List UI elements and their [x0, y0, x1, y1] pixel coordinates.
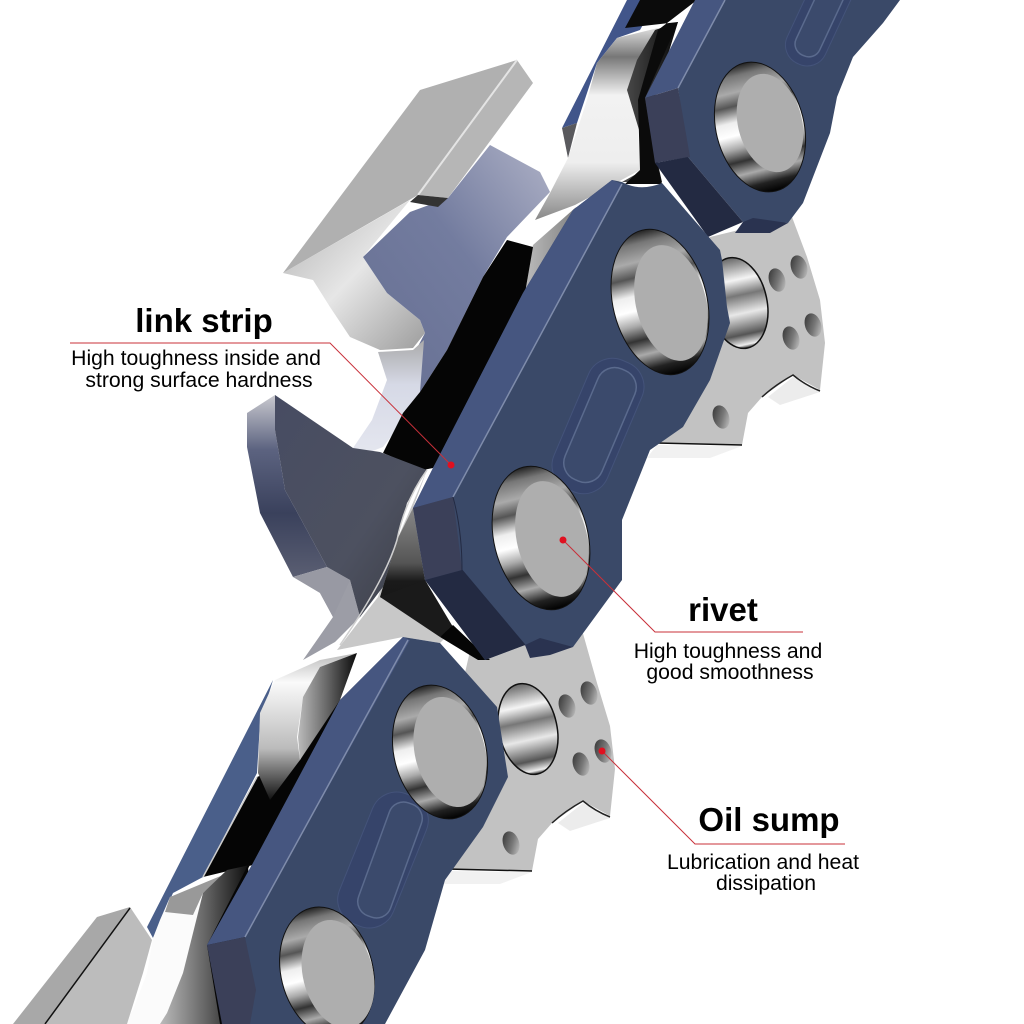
cutter blue side plate	[363, 145, 550, 392]
lower drive tooth	[430, 630, 615, 884]
lower chain link	[207, 637, 508, 1024]
cutter top plate	[283, 60, 517, 273]
leader line: rivet	[563, 540, 803, 632]
heading: link strip: link strip	[135, 302, 273, 339]
lower rivet	[379, 675, 501, 829]
top chain link	[645, 0, 900, 237]
leader line: oil sump	[602, 751, 845, 844]
marker: link strip	[448, 462, 454, 468]
heading: rivet: rivet	[688, 591, 758, 628]
callout: rivet	[560, 536, 822, 684]
marker: rivet	[560, 536, 566, 544]
description: oil sump: Lubrication and heat	[667, 851, 859, 874]
cutter under-curve	[283, 200, 425, 350]
callout: link strip	[70, 302, 454, 468]
description: oil sump: dissipation	[716, 872, 816, 895]
description: link strip: High toughness inside and	[71, 347, 321, 370]
lower back links	[123, 653, 357, 1024]
leader line: link strip	[70, 343, 451, 465]
upper rivet	[596, 219, 724, 385]
center rivet	[478, 456, 604, 620]
curved silver strip	[353, 340, 424, 452]
lower link slot	[330, 784, 436, 936]
marker: oil sump	[598, 748, 606, 754]
bottom cutter	[13, 907, 152, 1024]
bottom rivet	[266, 897, 388, 1024]
heading: oil sump: Oil sump	[698, 801, 840, 838]
depth gauge	[247, 395, 490, 660]
black gap	[383, 240, 533, 470]
description: link strip: strong surface hardness	[85, 369, 313, 392]
silver body below gauge	[337, 470, 453, 650]
upper drive tooth	[640, 217, 825, 458]
top back strip and silver link	[525, 0, 697, 293]
description: rivet: good smoothness	[646, 661, 814, 684]
description: rivet: High toughness and	[634, 640, 822, 663]
top cutter	[283, 60, 550, 470]
callout: oil sump	[598, 748, 859, 895]
center link slot	[544, 350, 652, 502]
center chain link	[413, 180, 730, 660]
